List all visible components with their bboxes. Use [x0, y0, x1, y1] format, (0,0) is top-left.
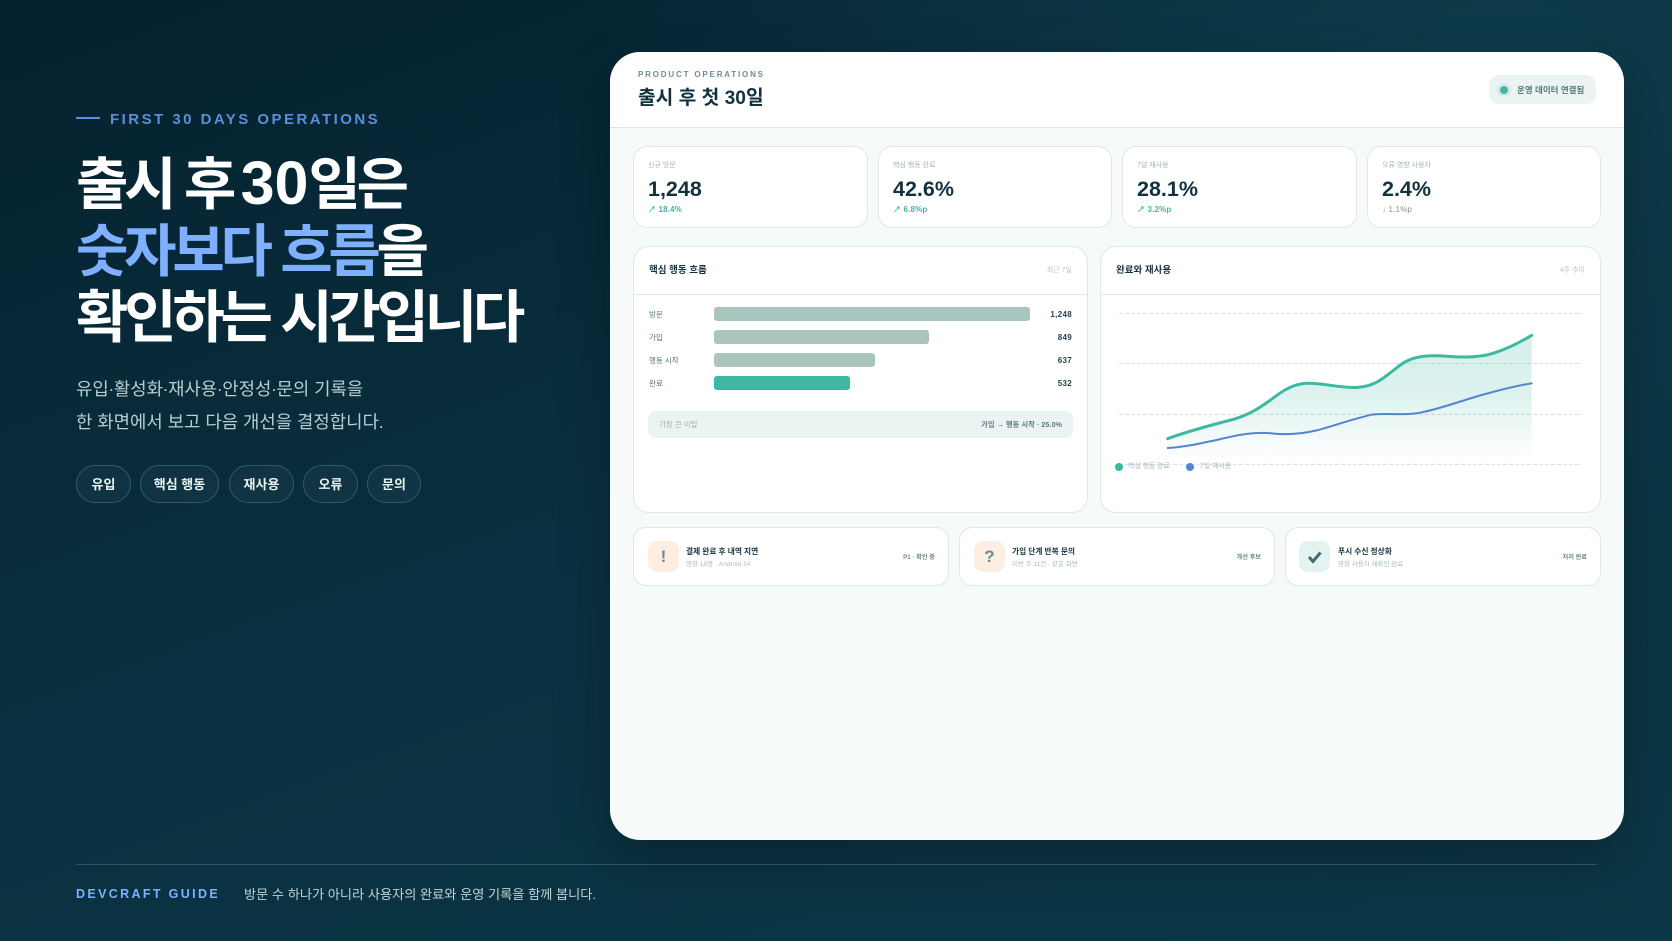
- legend: [1115, 462, 1231, 471]
- KPI: new visits: 1,248: [648, 177, 702, 201]
- funnel row: signup: 849: [1058, 333, 1072, 342]
- KPI: new visits: 신규 방문: [648, 162, 676, 169]
- footer rule: [76, 864, 1597, 865]
- tag chips: 핵심 행동: [154, 477, 205, 492]
- headline: [76, 149, 524, 350]
- issue: push restored: [1285, 527, 1601, 586]
- eyebrow: FIRST 30 DAYS OPERATIONS: [110, 111, 380, 128]
- footer message: 방문 수 하나가 아니라 사용자의 완료와 운영 기록을 함께 봅니다.: [244, 887, 596, 902]
- dashboard title: 출시 후 첫 30일: [638, 88, 764, 109]
- status pill: [1489, 75, 1596, 104]
- issue: payment delay: 영향 18명 · Android 14: [686, 561, 750, 568]
- KPI: affected users: ↓ 1.1%p: [1382, 205, 1412, 214]
- largest drop-off callout: 가입 → 행동 시작 · 25.0%: [981, 420, 1062, 429]
- tag chips: 유입: [92, 477, 115, 492]
- tag chips: 문의: [382, 477, 406, 492]
- funnel header rule: [634, 294, 1087, 295]
- funnel row: start: [649, 353, 1072, 367]
- dashboard header: [610, 52, 1624, 128]
- KPI: core action completion: ↗ 6.8%p: [893, 205, 927, 214]
- KPI: affected users: 2.4%: [1382, 177, 1431, 201]
- funnel row: complete: [649, 376, 1072, 390]
- description: [76, 379, 384, 432]
- headline: 숫자보다 흐름을: [76, 220, 425, 284]
- funnel row: complete: 완료: [649, 379, 663, 388]
- KPI: core action completion: 42.6%: [893, 177, 954, 201]
- legend: 7일 재사용: [1200, 463, 1231, 470]
- line chart period: 4주 추이: [1560, 267, 1585, 274]
- tag chips: 재사용: [244, 477, 279, 492]
- status dot: [1497, 83, 1511, 97]
- headline: 확인하는 시간입니다: [76, 286, 521, 350]
- panel: line chart: [1100, 246, 1601, 513]
- issue: payment delay: 결제 완료 후 내역 지연: [686, 547, 758, 556]
- funnel period: 최근 7일: [1047, 267, 1072, 274]
- issue: payment delay: [633, 527, 949, 586]
- line chart header rule: [1101, 294, 1600, 295]
- funnel row: complete: 532: [1058, 379, 1072, 388]
- eyebrow line: [76, 117, 100, 119]
- KPI: new visits: ↗ 18.4%: [648, 205, 682, 214]
- issue: signup inquiries: 개선 후보: [1236, 554, 1261, 561]
- funnel row: start: 637: [1058, 356, 1072, 365]
- issue: push restored: 처리 완료: [1562, 554, 1587, 561]
- issue: signup inquiries: 이번 주 11건 · 같은 화면: [1012, 561, 1078, 568]
- line chart title: 완료와 재사용: [1116, 265, 1171, 276]
- panel: funnel: [633, 246, 1088, 513]
- description: 한 화면에서 보고 다음 개선을 결정합니다.: [76, 412, 384, 432]
- issue: signup inquiries: [959, 527, 1275, 586]
- largest drop-off callout: [648, 411, 1073, 438]
- description: 유입·활성화·재사용·안정성·문의 기록을: [76, 379, 363, 399]
- KPI: 7-day reuse: 28.1%: [1137, 177, 1198, 201]
- KPI: core action completion: 핵심 행동 완료: [893, 162, 936, 169]
- funnel row: visit: [649, 307, 1072, 321]
- KPI: 7-day reuse: ↗ 3.2%p: [1137, 205, 1171, 214]
- issue: payment delay: P1 · 확인 중: [903, 554, 935, 561]
- issue: push restored: 영향 사용자 재확인 완료: [1338, 561, 1403, 568]
- tag chips: [76, 465, 421, 503]
- funnel title: 핵심 행동 흐름: [649, 265, 707, 276]
- status text: 운영 데이터 연결됨: [1517, 85, 1584, 95]
- funnel row: signup: 가입: [649, 333, 663, 342]
- funnel row: visit: 1,248: [1050, 310, 1072, 319]
- KPI: affected users: 오류 영향 사용자: [1382, 162, 1431, 169]
- KPI: 7-day reuse: 7일 재사용: [1137, 162, 1169, 169]
- tag chips: 오류: [319, 477, 342, 492]
- funnel row: start: 행동 시작: [649, 356, 679, 365]
- issue: signup inquiries: 가입 단계 반복 문의: [1012, 547, 1075, 556]
- issue: signup inquiries: ?: [984, 547, 995, 566]
- status dot core: [1500, 86, 1508, 94]
- line chart: [1119, 312, 1582, 465]
- KPI: affected users: [1367, 146, 1601, 228]
- funnel row: signup: [649, 330, 1072, 344]
- largest drop-off callout: 가장 큰 이탈: [659, 420, 698, 429]
- panel: dashboard: [610, 52, 1624, 840]
- legend: 핵심 행동 완료: [1128, 463, 1170, 470]
- issue: payment delay: !: [661, 547, 666, 566]
- KPI: new visits: [633, 146, 868, 228]
- funnel row: visit: 방문: [649, 310, 663, 319]
- KPI: 7-day reuse: [1122, 146, 1357, 228]
- KPI: core action completion: [878, 146, 1112, 228]
- headline: 출시 후 30일은: [76, 149, 405, 217]
- header eyebrow: PRODUCT OPERATIONS: [638, 70, 765, 79]
- issue: push restored: 푸시 수신 정상화: [1338, 547, 1392, 556]
- footer brand: DEVCRAFT GUIDE: [76, 887, 220, 901]
